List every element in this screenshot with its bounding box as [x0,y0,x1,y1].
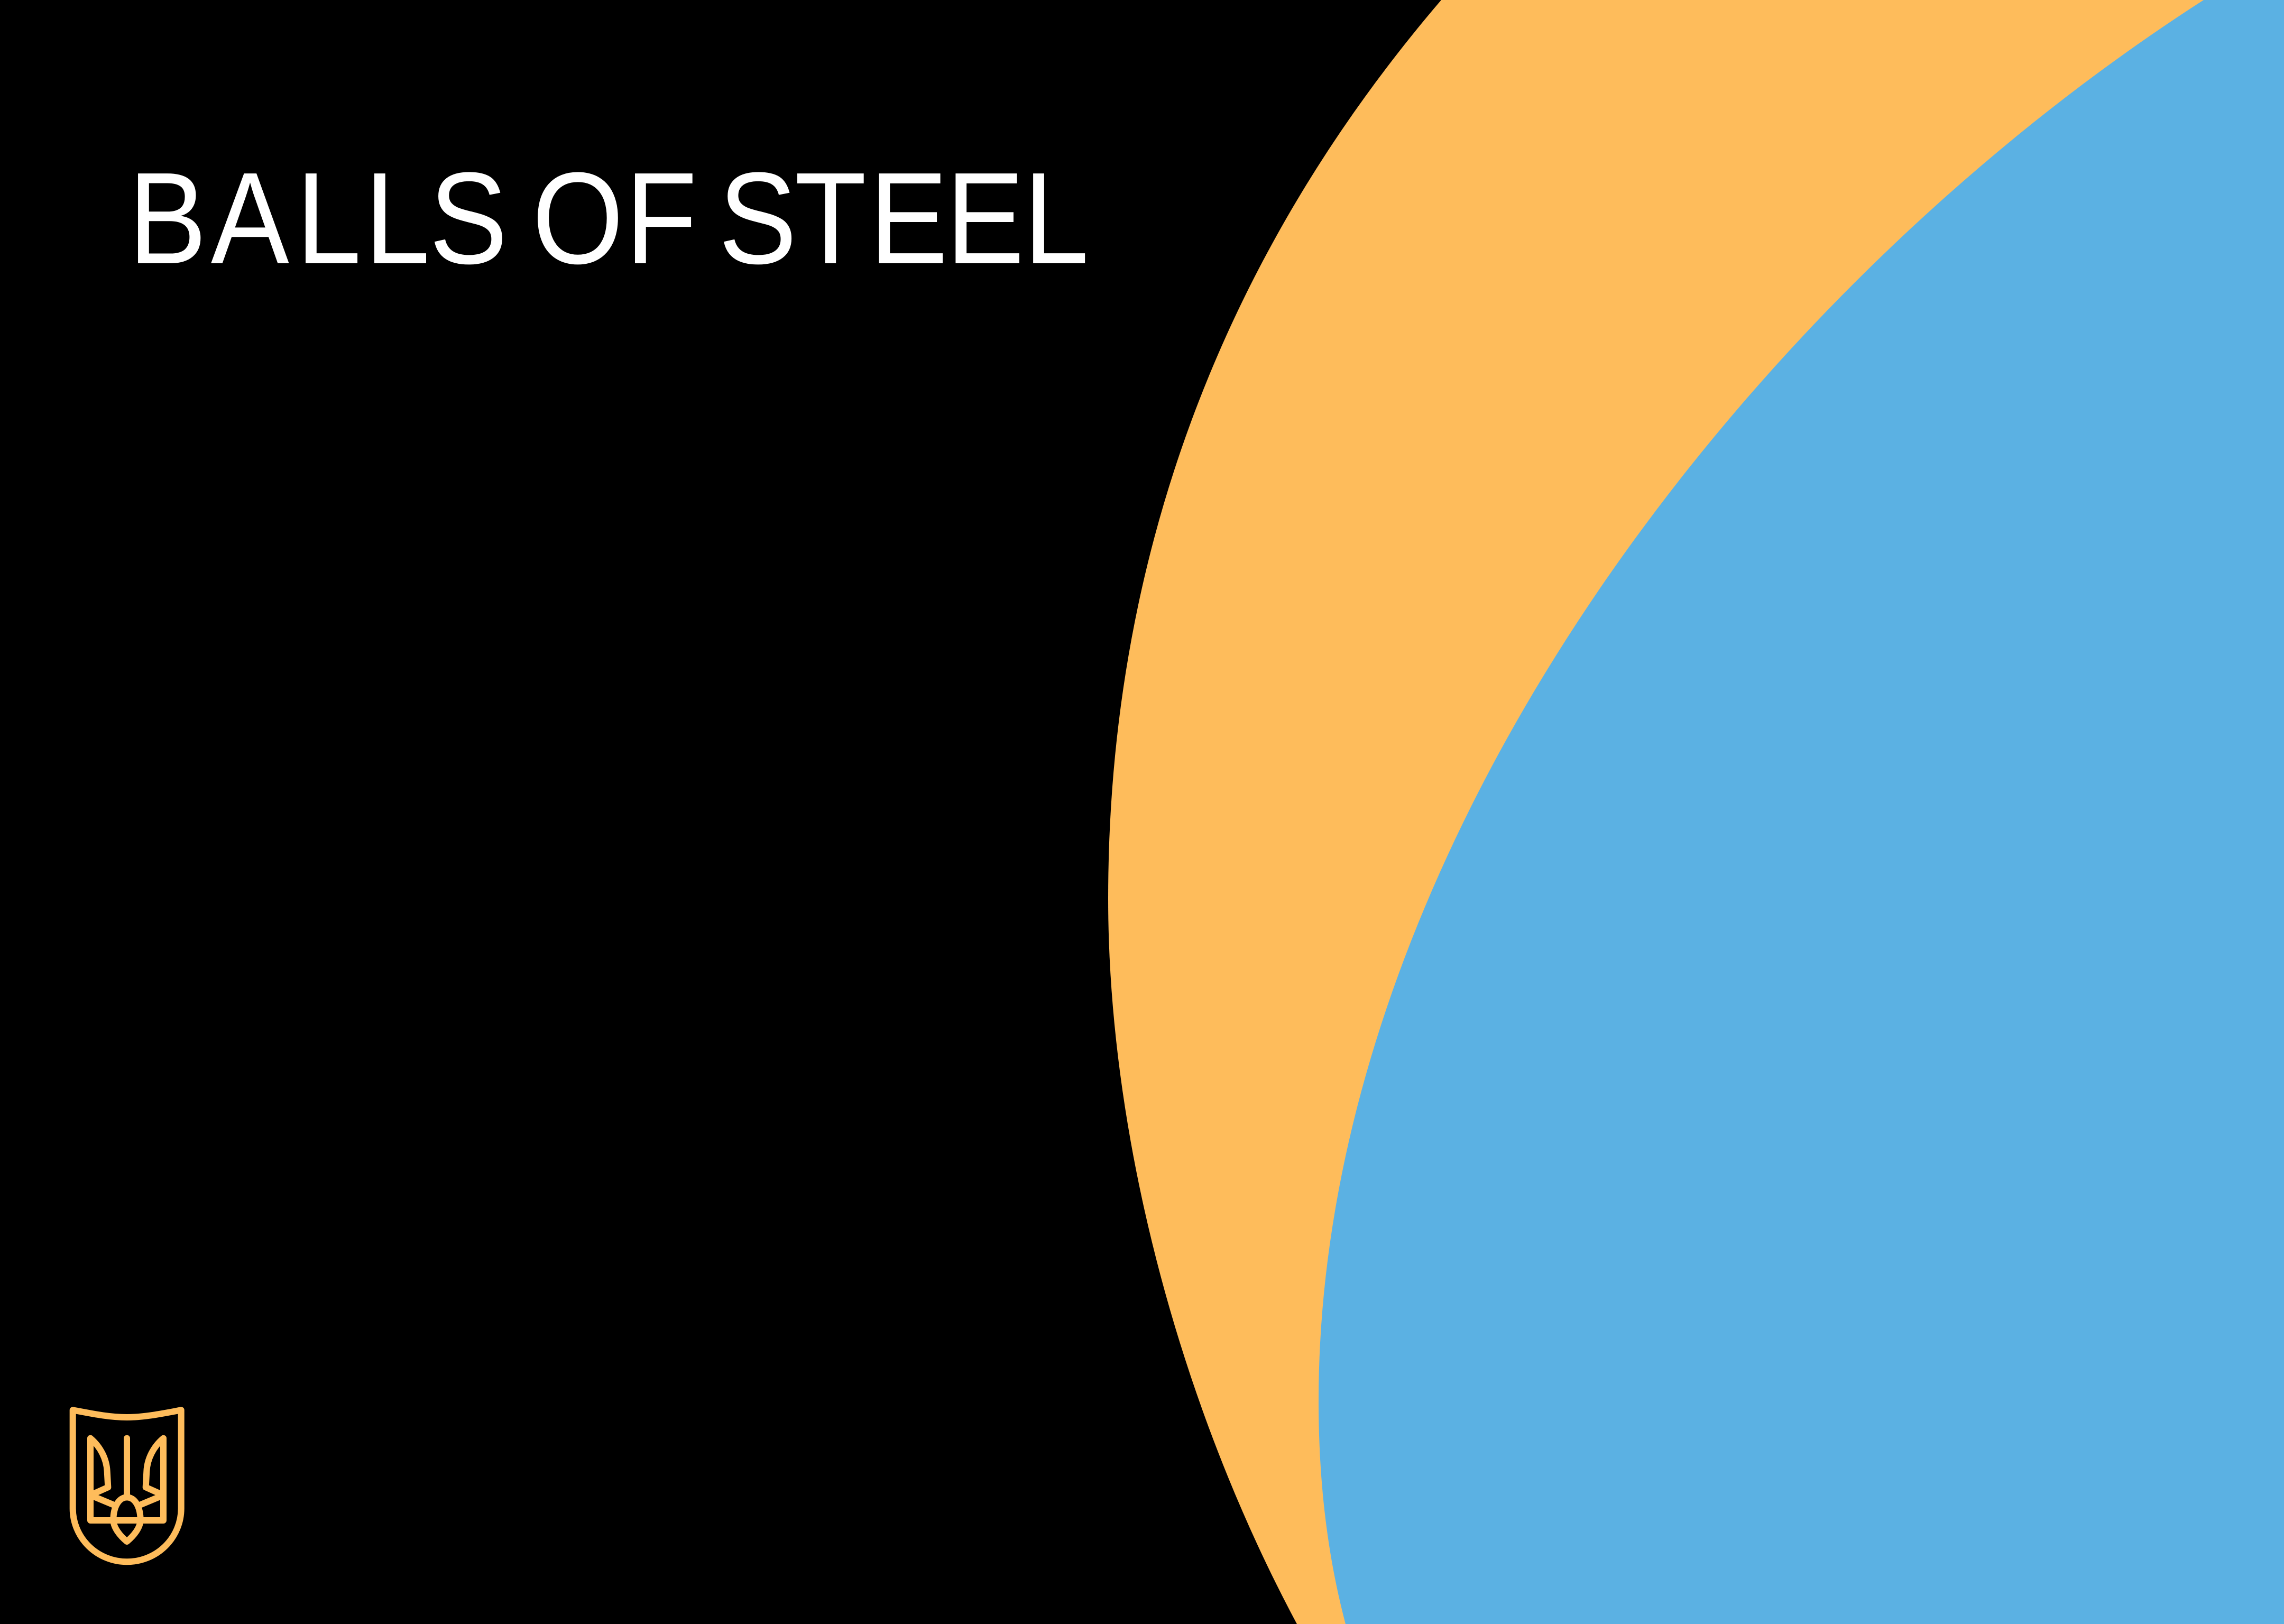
title: BALLS OF STEEL [128,145,1089,291]
icon: trident shield logo [73,1410,181,1562]
shape: orange curved panel [1108,0,2284,1624]
shape: blue curved panel [1319,0,2284,1624]
